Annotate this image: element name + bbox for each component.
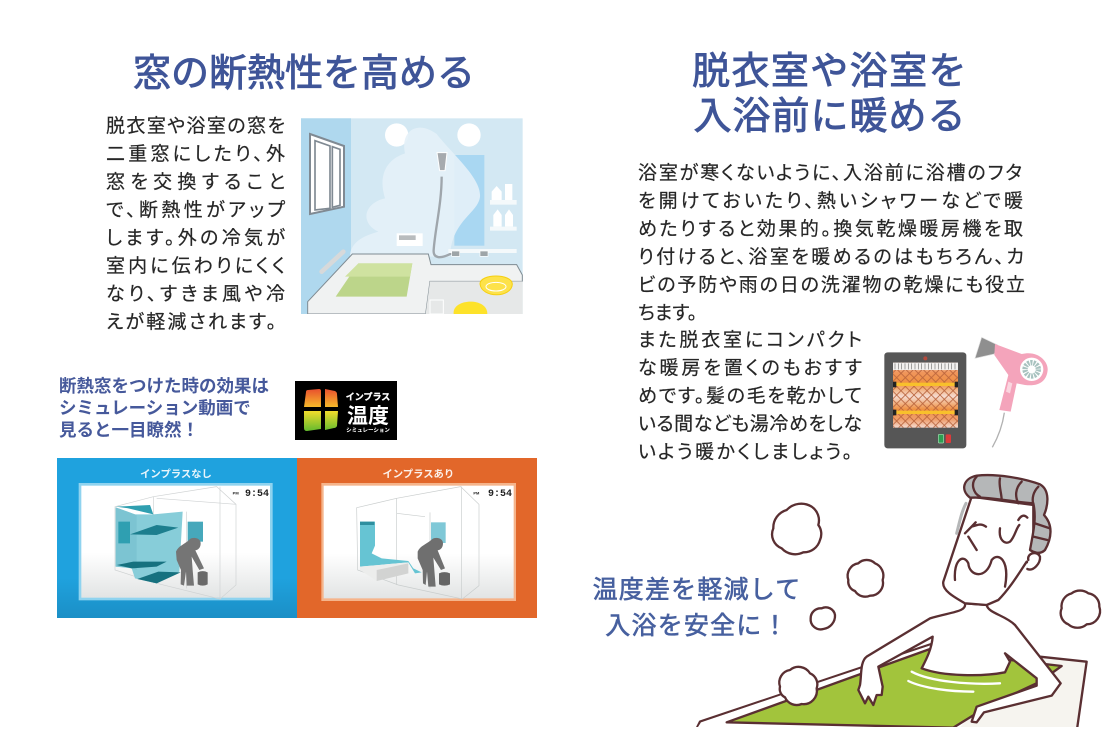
panel: window insulation — [57, 53, 537, 618]
callout: reduce temperature difference: 温度差を軽減して — [593, 576, 801, 604]
text block: warming explanation — [638, 162, 1025, 324]
without insulation: インプラスなし — [140, 469, 212, 481]
heading: second line: 入浴前に暖める — [693, 96, 966, 138]
callout: simulation video caption: シミュレーション動画で — [59, 398, 251, 418]
bath tub — [695, 643, 1087, 732]
text block: window insulation description: で、断熱性がアップ — [106, 200, 285, 221]
panel: warm rooms before bathing — [593, 51, 1102, 727]
text block: warming explanation: ビの予防や雨の日の洗濯物の乾燥にも役立 — [638, 275, 1025, 296]
text block: window insulation description: 脱衣室や浴室の窓を — [106, 116, 285, 137]
text block: window insulation description: なり、すきま風や冷 — [106, 284, 285, 305]
text block: warming explanation: めたりすると効果的。換気乾燥暖房機を取 — [638, 219, 1023, 240]
text block: warming explanation: 浴室が寒くないように、入浴前に浴槽のフタ — [638, 163, 1022, 184]
with insulation: 9:54 — [488, 488, 512, 499]
heading: warm rooms before bathing: 脱衣室や浴室を — [692, 51, 968, 93]
text block: window insulation description: します。外の冷気が — [106, 228, 285, 249]
text block: window insulation description: 室内に伝わりにくく — [106, 256, 285, 277]
text block: window insulation description: 二重窓にしたり、外 — [106, 144, 285, 165]
text block: window insulation description: 窓を交換すること — [106, 172, 285, 193]
with insulation — [297, 458, 537, 618]
callout: reduce temperature difference — [593, 576, 801, 640]
callout: reduce temperature difference: 入浴を安全に！ — [605, 612, 789, 640]
head — [943, 497, 1039, 605]
text block: compact heater advice — [638, 330, 862, 463]
callout: simulation video caption: 見ると一目瞭然！ — [59, 420, 199, 440]
without insulation: PM — [233, 491, 239, 496]
callout: simulation video caption: 断熱窓をつけた時の効果は — [59, 376, 269, 396]
face — [955, 516, 1027, 587]
text block: warming explanation: り付けると、浴室を暖めるのはもちろん、カ — [638, 247, 1024, 268]
steam clouds — [772, 504, 821, 554]
with insulation: インプラスあり — [382, 469, 454, 481]
bath water — [727, 649, 1062, 728]
logo: temperature simulation: シミュレーション — [346, 428, 390, 434]
body — [858, 603, 1061, 722]
illustration: bathroom with window — [301, 118, 523, 314]
logo: temperature simulation: インプラス — [346, 392, 390, 402]
with insulation: PM — [473, 491, 480, 496]
hair — [964, 475, 1050, 553]
text block: warming explanation: ちます。 — [638, 303, 697, 324]
text block: compact heater advice: な暖房を置くのもおすす — [638, 358, 862, 379]
heading: window insulation: 窓の断熱性を高める — [133, 53, 475, 95]
white ripples — [908, 672, 1000, 692]
text block: compact heater advice: また脱衣室にコンパクト — [638, 330, 862, 351]
illustration: man relaxing in bath with steam — [696, 474, 1102, 727]
text block: compact heater advice: めです。髪の毛を乾かして — [638, 386, 862, 407]
ear — [1027, 553, 1040, 570]
without insulation: 9:54 — [245, 488, 269, 499]
text block: compact heater advice: いる間なども湯冷めをしな — [638, 414, 862, 435]
logo: temperature simulation — [295, 381, 397, 440]
text block: warming explanation: を開けておいたり、熱いシャワーなどで暖 — [638, 191, 1023, 212]
logo: temperature simulation: 温度 — [347, 405, 389, 428]
chart: simulation video comparison — [57, 458, 537, 618]
text block: window insulation description: えが軽減されます。 — [106, 312, 276, 333]
callout: simulation video caption — [59, 376, 269, 440]
without insulation — [57, 458, 297, 618]
icon: electric heater and hair dryer — [884, 337, 1048, 448]
text block: compact heater advice: いよう暖かくしましょう。 — [638, 442, 852, 463]
text block: window insulation description — [106, 116, 286, 333]
